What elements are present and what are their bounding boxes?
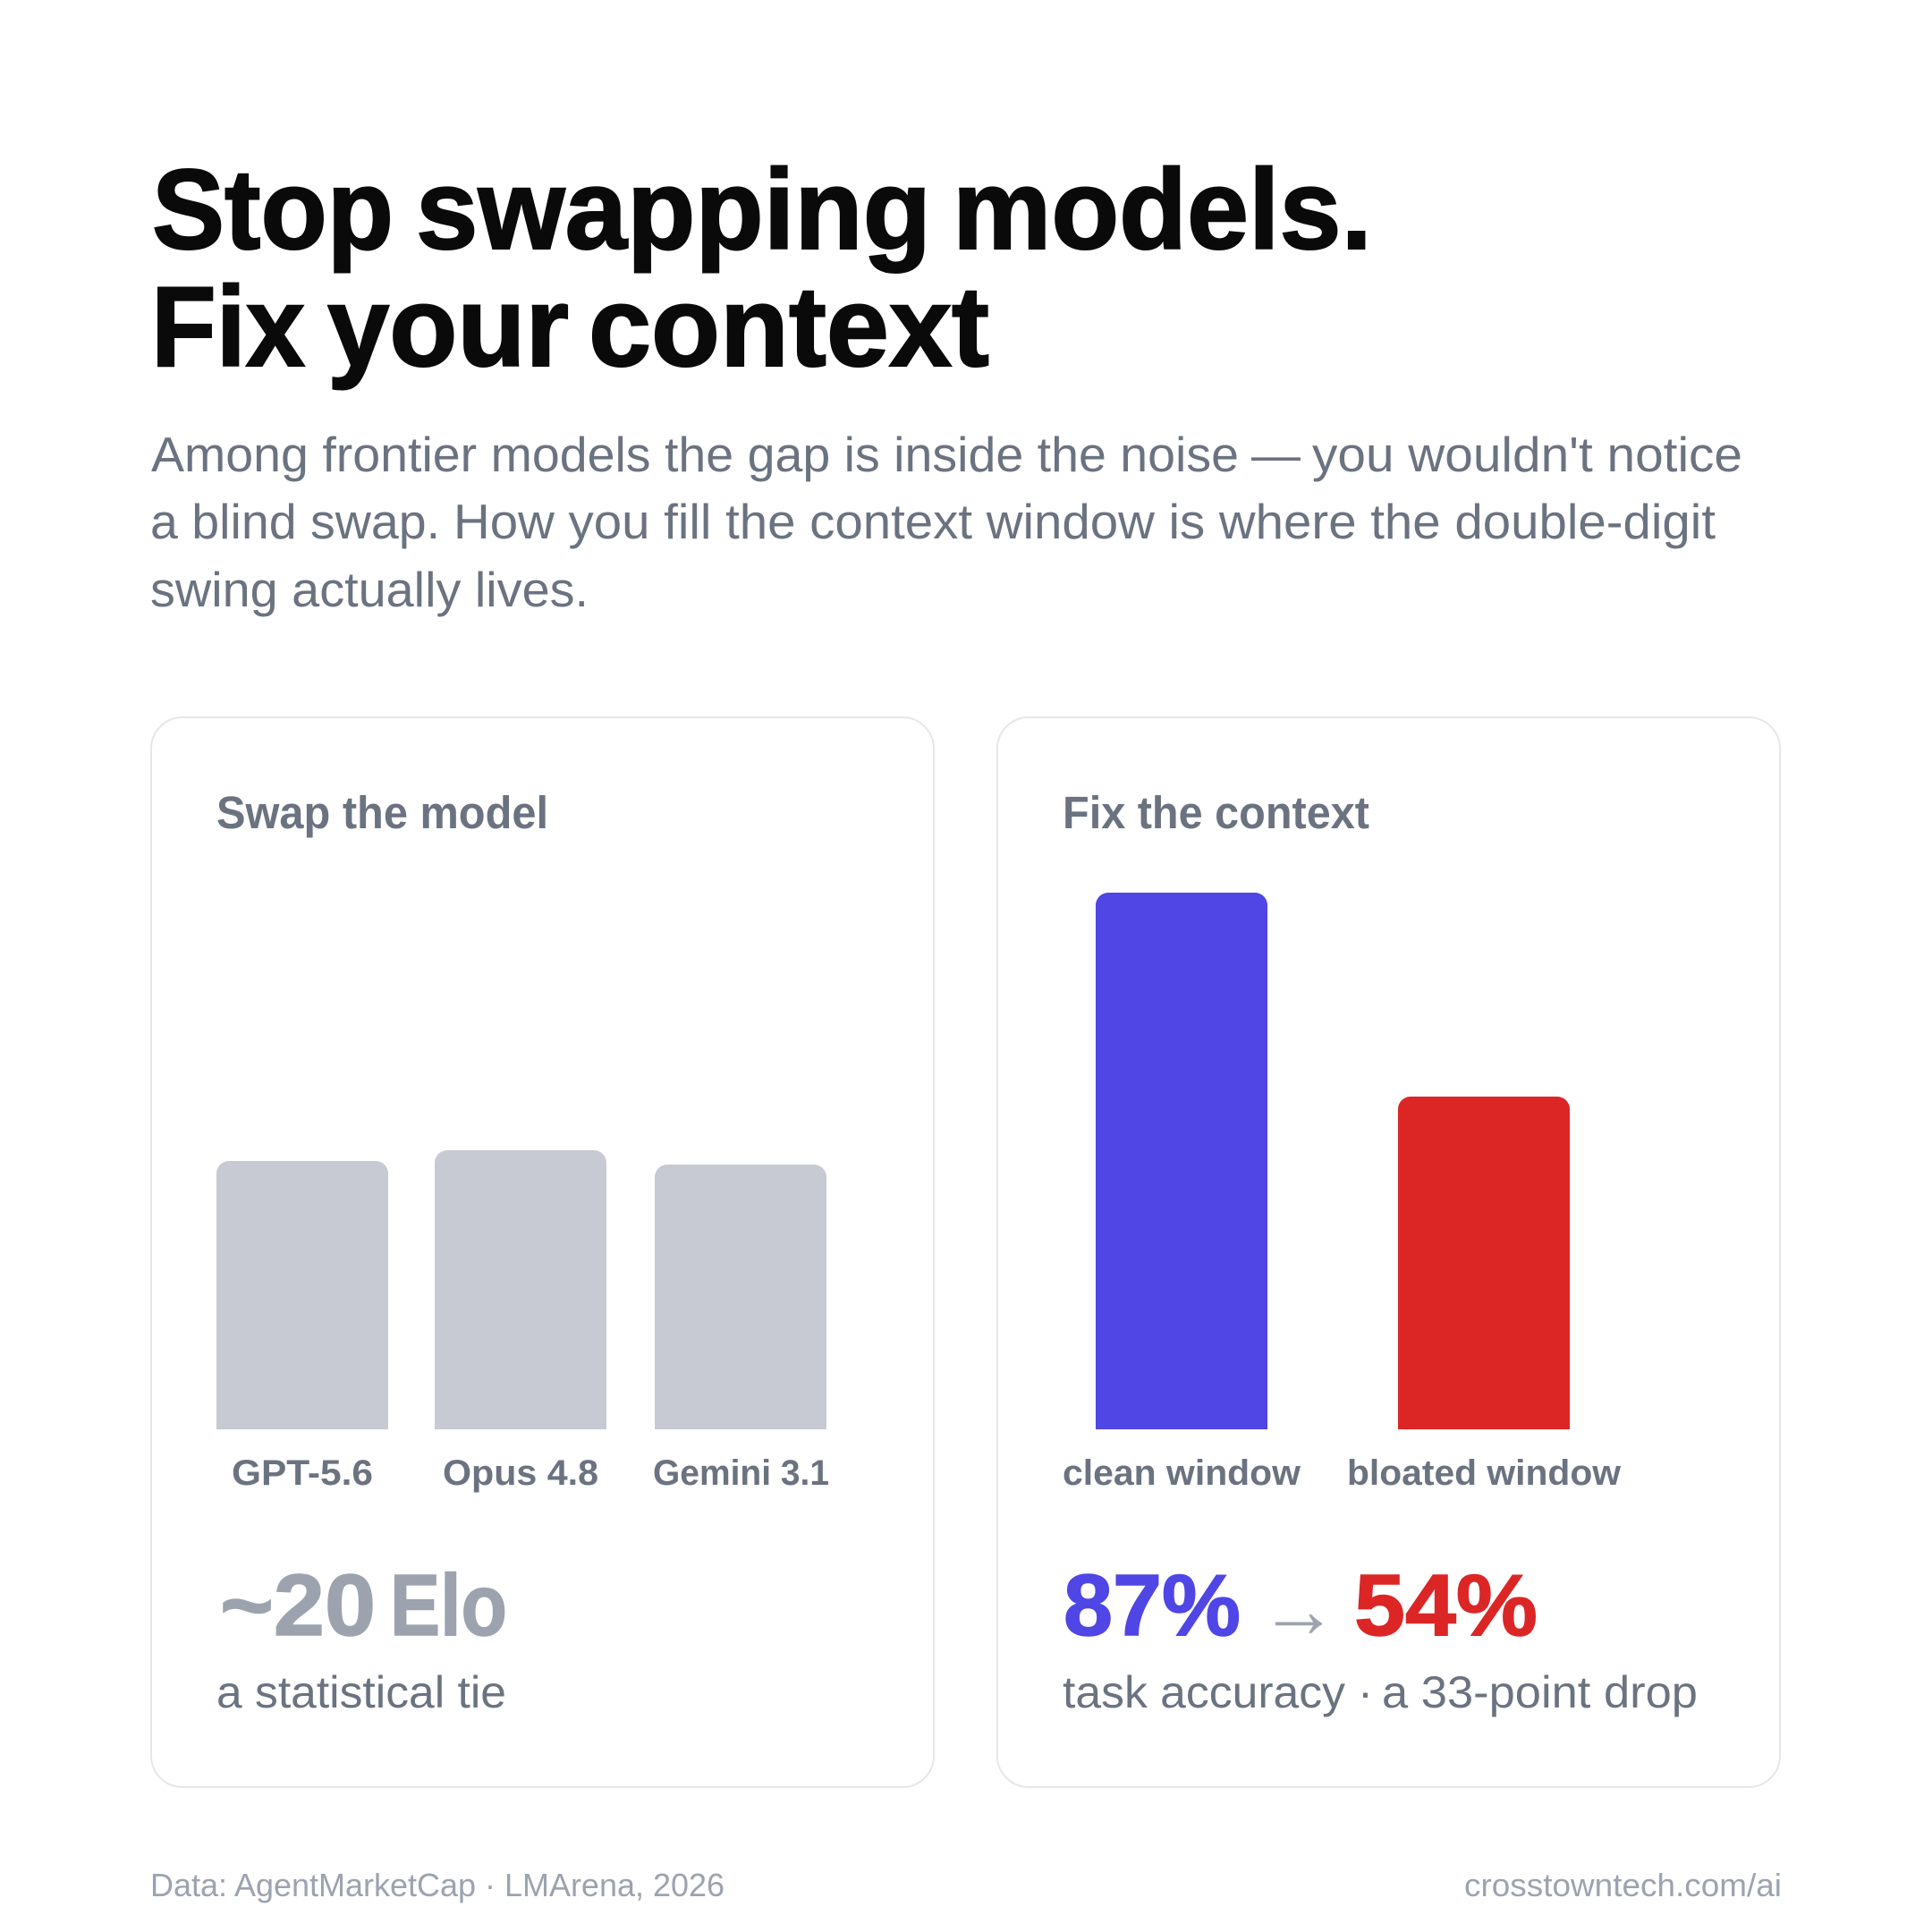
stat: 87 percent: 87% — [1063, 1556, 1241, 1654]
stat: about 20 Elo: Elo — [390, 1556, 507, 1654]
title: models. — [953, 146, 1372, 273]
bar: GPT-5.6 — [216, 1161, 388, 1429]
footer: data source: Data: AgentMarketCap · LMArena, 2026 — [150, 1867, 724, 1903]
bar chart: task accuracy — [1063, 893, 1622, 1493]
subtitle: Among frontier models the gap is inside the noise — [151, 427, 1239, 482]
title: Fix — [151, 263, 305, 390]
footer: site url: crosstowntech.com/ai — [1464, 1867, 1782, 1903]
bar: clean window — [1096, 893, 1267, 1429]
subtitle: you wouldn't notice — [1312, 427, 1742, 482]
subtitle: — — [1251, 427, 1301, 482]
stat: about 20 Elo: ~20 — [220, 1556, 376, 1654]
stat caption: · — [1358, 1667, 1373, 1717]
subtitle — [150, 427, 1742, 617]
stat: 54 percent: 54% — [1354, 1556, 1538, 1654]
title: your — [327, 263, 569, 390]
title: swapping — [416, 146, 931, 273]
bar chart: model scores — [216, 1150, 829, 1493]
subtitle: swing actually lives. — [150, 562, 589, 617]
title: Stop — [152, 146, 394, 273]
panel heading: Fix the context — [1063, 787, 1369, 838]
bar: Opus 4.8 — [435, 1150, 606, 1429]
title — [151, 146, 1372, 390]
panel: fix the context — [997, 717, 1780, 1787]
panel background — [997, 717, 1780, 1787]
stat caption: task accuracy — [1063, 1667, 1345, 1717]
subtitle: How you fill the context window is where the double-digit — [453, 494, 1716, 549]
title: context — [589, 263, 989, 390]
label: Opus 4.8: Opus 4.8 — [443, 1453, 598, 1493]
label: bloated window: bloated window — [1347, 1453, 1622, 1493]
panel heading: Swap the model — [216, 787, 548, 838]
panel: swap the model — [151, 717, 934, 1787]
panel background — [151, 717, 934, 1787]
label: clean window: clean window — [1063, 1453, 1301, 1493]
stat caption: a statistical tie — [216, 1667, 506, 1717]
bar: bloated window — [1398, 1097, 1570, 1429]
subtitle: a blind swap. — [150, 494, 440, 549]
arrow: → — [1259, 1565, 1338, 1654]
label: Gemini 3.1: Gemini 3.1 — [653, 1453, 829, 1493]
bar: Gemini 3.1 — [655, 1165, 826, 1429]
label: GPT-5.6: GPT-5.6 — [232, 1453, 373, 1493]
stat caption: a 33-point drop — [1382, 1667, 1698, 1717]
